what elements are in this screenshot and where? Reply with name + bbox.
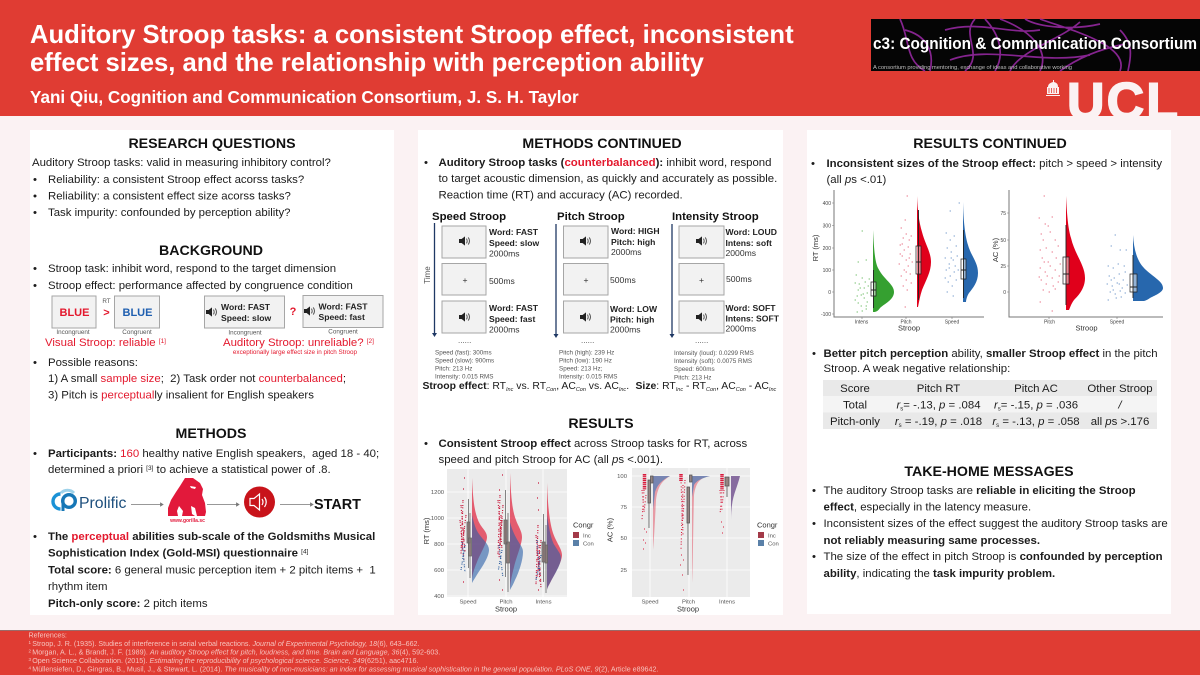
research questions text: • xyxy=(33,207,37,219)
correlation table: Pitch RT xyxy=(917,383,960,395)
background bullets xyxy=(33,263,353,292)
correlation table: p = .058 xyxy=(1038,416,1080,428)
size definition: Con xyxy=(706,387,716,393)
pitch stroop procedure: Pitch: high xyxy=(611,237,655,247)
footer: references: Open Science Collaboration. (2015). xyxy=(32,657,150,665)
axis labels: 0 xyxy=(1003,290,1006,296)
methods continued text xyxy=(424,157,777,202)
intensity stroop procedure: 2000ms xyxy=(726,248,756,258)
chart: RT effect size xyxy=(811,190,984,332)
panel: middle column xyxy=(418,130,783,615)
inconsistent sizes text xyxy=(811,158,1162,186)
gold-msi text: • xyxy=(33,531,37,543)
heading: take-home messages: TAKE-HOME MESSAGES xyxy=(904,464,1074,480)
take-home text: • xyxy=(812,485,816,497)
methods continued text: Auditory Stroop tasks (counterbalanced): inhibit word, respond xyxy=(438,157,771,169)
visual stroop diagram: Visual Stroop: reliable xyxy=(45,337,156,349)
stroop effect definition: . xyxy=(626,381,629,392)
auditory stroop diagram: Speed: fast xyxy=(318,312,365,322)
visual stroop diagram xyxy=(45,296,166,349)
auditory stroop diagram: ? xyxy=(290,306,297,318)
pitch stroop procedure: Word: LOW xyxy=(610,304,658,314)
speed stroop procedure: Speed Stroop xyxy=(432,211,506,223)
speed stroop procedure: Speed: slow xyxy=(489,238,539,248)
axes labels: Stroop xyxy=(495,604,517,614)
stroop effect definition: Stroop effect: RT xyxy=(422,381,506,392)
visual stroop diagram: RT xyxy=(102,298,111,305)
axis labels: 25 xyxy=(1000,264,1006,270)
research questions text: Reliability: a consistent Stroop effect acorss tasks? xyxy=(48,174,304,186)
icon: prolific: Prolific xyxy=(79,495,126,512)
axes labels: 400 xyxy=(434,594,445,600)
icon: prolific xyxy=(53,490,126,512)
intensity stroop procedure: Intensity Stroop xyxy=(672,211,759,223)
correlation table: = -.13, xyxy=(903,400,939,412)
participants text: • xyxy=(33,448,37,460)
size definition: Inc xyxy=(676,387,683,393)
gold-msi text: Pitch-only score: 2 pitch items xyxy=(48,598,208,610)
research questions text xyxy=(32,157,331,219)
correlation table: p = .018 xyxy=(941,416,982,428)
legend: Inc xyxy=(768,534,776,540)
heading: results: RESULTS xyxy=(568,416,634,432)
chart: RT raincloud by congruence xyxy=(422,469,594,614)
icon: audio xyxy=(244,486,275,518)
intensity stroop procedure: Intens: soft xyxy=(726,238,772,248)
authors: Yani Qiu, Cognition and Communication Consortium, J. S. H. Taylor xyxy=(30,88,579,107)
axes labels: RT (ms) xyxy=(422,517,431,544)
arrow xyxy=(207,503,239,506)
size definition: Con xyxy=(736,387,746,393)
axes labels: 50 xyxy=(620,536,628,542)
auditory stroop diagram: Word: FAST xyxy=(318,302,368,312)
gold-msi text: [4] xyxy=(301,548,309,556)
box plots xyxy=(648,475,729,575)
take-home text: • xyxy=(812,518,816,530)
stroop effect definition: , AC xyxy=(556,381,576,392)
perception relationship text: Better pitch perception ability, smaller Stroop effect in the pitch xyxy=(824,348,1158,360)
pitch stroop procedure: Pitch (low): 190 Hz xyxy=(559,358,612,364)
axis labels: Stroop xyxy=(898,324,920,332)
intensity stroop procedure: Intens: SOFT xyxy=(726,314,780,324)
possible reasons: 1) A small sample size; 2) Task order not counterbalanced; xyxy=(48,373,346,385)
axis labels: 300 xyxy=(823,224,831,230)
results text: Consistent Stroop effect across Stroop tasks for RT, across xyxy=(438,438,747,450)
axis labels: 75 xyxy=(1000,211,1006,217)
take-home text: ability, indicating the task impurity problem. xyxy=(824,568,1055,580)
size definition: Inc xyxy=(769,387,777,393)
axis labels: -100 xyxy=(821,312,831,318)
axes labels: 75 xyxy=(620,505,628,511)
pitch stroop procedure: ...... xyxy=(581,336,594,345)
visual stroop diagram: BLUE xyxy=(123,307,152,319)
speed stroop procedure: Speed: fast xyxy=(489,314,535,324)
speed stroop procedure: Speed (fast): 300ms xyxy=(435,350,492,356)
take-home text xyxy=(812,485,1168,580)
pitch stroop procedure: Pitch: high xyxy=(610,314,654,324)
axis labels: RT (ms) xyxy=(811,234,820,261)
auditory stroop diagram: Speed: slow xyxy=(221,313,271,323)
heading: background: BACKGROUND xyxy=(159,243,263,259)
correlation table: s xyxy=(899,423,902,429)
header band xyxy=(0,0,1200,116)
correlation table: s xyxy=(900,406,903,412)
legend: Con xyxy=(768,542,779,548)
correlation table: Pitch AC xyxy=(1014,383,1058,395)
legend: Con xyxy=(583,542,594,548)
footer: references: The musicality of non-musicians: an index for assessing musical sophistication in the general population. PLoS ONE, 9(2), Article e89642. xyxy=(224,666,658,674)
intensity stroop procedure: Word: SOFT xyxy=(726,303,776,313)
research questions text: • xyxy=(33,190,37,202)
correlation table: r xyxy=(895,416,900,428)
axes labels: Speed xyxy=(641,600,659,606)
axis labels: Pitch xyxy=(1044,320,1055,326)
auditory stroop diagram: Incongruent xyxy=(228,330,262,336)
correlation table: Total xyxy=(843,400,867,412)
axes labels xyxy=(422,490,552,614)
methods continued text: to target acoustic dimension, as quickly and accurately as possible. xyxy=(438,173,777,185)
speed stroop procedure: Intensity: 0.015 RMS xyxy=(435,374,493,380)
correlation table xyxy=(823,380,1157,429)
speed stroop procedure xyxy=(432,211,539,380)
research questions text: Reliability: a consistent effect size acorss tasks? xyxy=(48,190,291,202)
pitch stroop procedure: Intensity: 0.015 RMS xyxy=(559,374,617,380)
visual stroop diagram: Congruent xyxy=(122,329,152,336)
rain points xyxy=(1039,196,1128,311)
speed stroop procedure: Word: FAST xyxy=(489,227,539,237)
intensity stroop procedure: Intensity (loud): 0.0299 RMS xyxy=(674,350,754,357)
stroop effect definition: Con xyxy=(546,387,556,393)
stroop effect definition: Inc xyxy=(619,387,626,393)
axes labels: Intens xyxy=(535,600,552,606)
violins xyxy=(1066,196,1085,310)
axis labels: 200 xyxy=(823,246,831,252)
visual stroop diagram: Incongruent xyxy=(56,329,90,336)
visual stroop diagram: > xyxy=(103,307,110,319)
auditory stroop diagram: Congruent xyxy=(328,328,358,336)
auditory stroop diagram: Word: FAST xyxy=(221,302,271,312)
heading: research questions: RESEARCH QUESTIONS xyxy=(128,136,296,152)
intensity stroop procedure: 2000ms xyxy=(726,324,756,334)
footer: references: 2 xyxy=(28,648,32,654)
footer: references: An auditory Stroop effect for pitch, loudness, and time. Brain and Language, 36(4), 592-603. xyxy=(150,648,440,656)
auditory stroop diagram: [2] xyxy=(367,338,374,345)
pitch stroop procedure: Word: HIGH xyxy=(611,226,660,236)
intensity stroop procedure: Speed: 600ms xyxy=(674,366,715,373)
background bullets: • xyxy=(33,263,37,275)
take-home text: The size of the effect in pitch Stroop is confounded by perception xyxy=(824,551,1163,563)
axes labels: Intens xyxy=(719,600,735,606)
inconsistent sizes text: • xyxy=(811,158,815,170)
correlation table: s xyxy=(996,423,999,429)
icon: gorilla xyxy=(168,478,206,524)
auditory stroop diagram: Auditory Stroop: unreliable? xyxy=(223,337,364,349)
correlation table: all ps >.176 xyxy=(1091,416,1149,428)
axis labels: Speed xyxy=(1110,320,1124,326)
speed stroop procedure: Word: FAST xyxy=(489,303,539,313)
axes labels: AC (%) xyxy=(606,517,614,542)
pitch stroop procedure: 2000ms xyxy=(611,247,642,257)
correlation table: / xyxy=(1117,400,1123,412)
possible reasons xyxy=(33,357,346,402)
box plots xyxy=(467,490,548,593)
correlation table: s xyxy=(998,406,1001,412)
intensity stroop procedure: Word: LOUD xyxy=(726,227,777,237)
gold-msi text: Sophistication Index (Gold-MSI) questionnaire xyxy=(48,548,298,560)
chart: AC raincloud by congruence xyxy=(606,468,779,614)
speed stroop procedure: 2000ms xyxy=(489,324,520,334)
axes labels: 800 xyxy=(434,542,445,548)
size definition: - RT xyxy=(683,381,707,392)
legend xyxy=(573,520,594,548)
axis labels xyxy=(811,201,959,332)
pitch stroop procedure xyxy=(554,211,660,380)
footer: references: References: xyxy=(28,632,67,640)
box plots xyxy=(871,210,966,308)
axis labels: Speed xyxy=(945,320,959,326)
violins xyxy=(653,476,670,550)
speed stroop procedure: 2000ms xyxy=(489,248,520,258)
visual stroop diagram: BLUE xyxy=(60,307,89,319)
axes labels: Speed xyxy=(459,600,477,606)
axes labels: 25 xyxy=(620,568,628,574)
intensity stroop procedure: 500ms xyxy=(726,274,752,284)
axes labels xyxy=(606,474,735,614)
correlation table: p = .036 xyxy=(1037,400,1078,412)
correlation table: Score xyxy=(840,383,870,395)
axis labels: Stroop xyxy=(1075,324,1098,332)
size definition: - AC xyxy=(746,381,769,392)
axes labels: 100 xyxy=(617,474,628,480)
title: effect sizes, and the relationship with perception ability xyxy=(30,49,705,77)
arrow xyxy=(131,503,163,506)
visual stroop diagram: [1] xyxy=(159,338,166,345)
start label: START xyxy=(314,497,361,513)
axis labels xyxy=(991,211,1124,332)
stroop effect definition: Con xyxy=(576,387,586,393)
gold-msi text: Total score: 6 general music perception item + 2 pitch items + 1 xyxy=(48,564,376,576)
possible reasons: • xyxy=(33,357,37,369)
stroop effect definition: vs. RT xyxy=(513,381,547,392)
methods continued text: Reaction time (RT) and accuracy (AC) recorded. xyxy=(438,190,683,202)
take-home text: • xyxy=(812,551,816,563)
pitch stroop procedure: 500ms xyxy=(610,275,636,285)
axes labels: 600 xyxy=(434,568,445,574)
intensity stroop procedure: Intensity (soft): 0.0075 RMS xyxy=(674,358,752,365)
footer: references: Morgan, A. L., & Brandt, J. F. (1989). xyxy=(32,648,150,656)
methods continued text: • xyxy=(424,157,428,169)
stroop effect definition: vs. AC xyxy=(586,381,619,392)
legend: Inc xyxy=(583,534,591,540)
possible reasons: Possible reasons: xyxy=(48,357,138,369)
title: Auditory Stroop tasks: a consistent Stroop effect, inconsistent xyxy=(30,21,794,49)
footer: references: Stroop, J. R. (1935). Studies of interference in serial verbal reactions. xyxy=(32,640,252,648)
time label: Time xyxy=(423,266,432,284)
take-home text: The auditory Stroop tasks are reliable in eliciting the Stroop xyxy=(824,485,1136,497)
correlation table: p = .084 xyxy=(939,400,981,412)
intensity stroop procedure: Pitch: 213 Hz xyxy=(674,374,711,382)
panel: right column xyxy=(807,130,1171,614)
legend xyxy=(757,520,779,548)
speed stroop procedure: 500ms xyxy=(489,276,515,286)
speed stroop procedure: Speed (slow): 900ms xyxy=(435,358,494,364)
correlation table: Pitch-only xyxy=(830,416,880,428)
auditory stroop diagram: exceptionally large effect size in pitch Stroop xyxy=(233,349,358,356)
pitch stroop procedure: Speed: 213 Hz; xyxy=(559,366,603,372)
footer: references: 3 xyxy=(28,657,32,662)
footer: references: 4 xyxy=(28,666,32,670)
footer: references xyxy=(0,630,1200,675)
UCL logo: UCL xyxy=(1067,73,1178,131)
axis labels: 100 xyxy=(823,268,831,274)
c3 banner xyxy=(871,19,1200,71)
panel: left column xyxy=(30,130,394,615)
correlation table: r xyxy=(994,400,999,412)
UCL logo xyxy=(1046,80,1178,116)
axis labels: AC (%) xyxy=(991,237,1000,262)
inconsistent sizes text: (all ps <.01) xyxy=(826,174,887,186)
possible reasons: 3) Pitch is perceptually insalient for English speakers xyxy=(48,390,314,402)
pitch stroop procedure: 2000ms xyxy=(610,324,641,334)
footer: references: 1 xyxy=(28,640,32,645)
axis labels: 400 xyxy=(823,201,831,207)
perception relationship text: • xyxy=(812,348,816,360)
axes labels: 1000 xyxy=(431,516,445,522)
results text xyxy=(424,438,747,466)
correlation table: = -.19, xyxy=(902,416,941,428)
perception relationship text xyxy=(812,348,1158,375)
intensity stroop procedure: ...... xyxy=(695,336,708,345)
research questions text: • xyxy=(33,174,37,186)
intensity stroop procedure xyxy=(670,211,780,382)
stroop effect definition: Inc xyxy=(506,387,514,393)
research questions text: Task impurity: confounded by perception ability? xyxy=(48,207,291,219)
gold-msi text: The perceptual abilities sub-scale of the Goldsmiths Musical xyxy=(48,531,375,543)
inconsistent sizes text: Inconsistent sizes of the Stroop effect: pitch > speed > intensity xyxy=(826,158,1162,170)
correlation table: Other Stroop xyxy=(1087,383,1153,395)
violins xyxy=(873,230,894,312)
size definition: , AC xyxy=(716,381,736,392)
axes labels: Stroop xyxy=(677,604,699,614)
footer: references: Estimating the reproducibility of psychological science. Science, 349(6251), aac4716. xyxy=(150,657,418,665)
correlation table: = -.13, xyxy=(999,416,1038,428)
research questions text: Auditory Stroop tasks: valid in measuring inhibitory control? xyxy=(32,157,331,169)
speed stroop procedure: Pitch: 213 Hz xyxy=(435,366,472,372)
pitch stroop procedure: Pitch (high): 239 Hz xyxy=(559,350,614,356)
background bullets: • xyxy=(33,280,37,292)
intensity stroop procedure: + xyxy=(699,275,704,285)
axis labels: 50 xyxy=(1000,238,1006,244)
correlation table: r xyxy=(896,400,901,412)
footer: references: Müllensiefen, D., Gingras, B., Musil, J., & Stewart, L. (2014). xyxy=(32,666,224,674)
legend: Congr xyxy=(757,520,778,530)
speed stroop procedure: + xyxy=(462,275,468,285)
recruitment flow xyxy=(53,478,361,524)
pitch stroop procedure: Pitch Stroop xyxy=(557,211,625,223)
footer: references: Journal of Experimental Psychology, 18(6), 643–662. xyxy=(252,640,419,648)
results text: speed and pitch Stroop for AC (all ps <.001). xyxy=(438,454,663,466)
heading: methods continued: METHODS CONTINUED xyxy=(522,136,682,152)
participants text xyxy=(33,448,379,476)
background bullets: Stroop task: inhibit word, respond to the target dimension xyxy=(48,263,336,275)
take-home text: Inconsistent sizes of the effect suggest the auditory Stroop tasks are xyxy=(824,518,1168,530)
speed stroop procedure: ...... xyxy=(458,336,471,345)
heading: results continued: RESULTS CONTINUED xyxy=(913,136,1067,152)
rain points xyxy=(642,474,724,590)
take-home text: effect, especially in the latency measure. xyxy=(824,502,1031,514)
axes labels: Pitch xyxy=(682,600,695,606)
auditory stroop diagram xyxy=(204,296,383,356)
heading: methods: METHODS xyxy=(176,426,246,442)
icon: gorilla: www.gorilla.sc xyxy=(169,518,205,524)
size definition: Size: RT xyxy=(636,381,676,392)
axes labels: 1200 xyxy=(431,490,445,496)
box plots xyxy=(1063,225,1137,305)
axis labels: Intens xyxy=(855,320,869,326)
axis labels: Pitch xyxy=(900,320,912,326)
correlation table: = -.15, xyxy=(1001,400,1037,412)
participants text: to achieve a statistical power of .8. xyxy=(153,464,331,476)
gold-msi text xyxy=(33,531,376,610)
background bullets: Stroop effect: performance affected by congruence condition xyxy=(48,280,353,292)
results text: • xyxy=(424,438,428,450)
arrow xyxy=(280,503,313,506)
axes labels: Pitch xyxy=(499,600,513,606)
axis labels: 0 xyxy=(828,290,831,296)
c3 banner: A consortium providing mentoring, exchange of ideas and collaborative working xyxy=(873,65,1072,71)
violins xyxy=(472,473,562,590)
chart: AC effect size xyxy=(991,190,1163,332)
participants text: Participants: 160 healthy native English speakers, aged 18 - 40; xyxy=(48,448,379,460)
participants text: [3] xyxy=(146,465,154,472)
participants text: determined a priori xyxy=(48,464,143,476)
legend: Congr xyxy=(573,520,594,530)
rain points xyxy=(460,475,541,590)
take-home text: not reliably measuring same processes. xyxy=(824,535,1040,547)
correlation table: r xyxy=(992,416,997,428)
rain points xyxy=(855,196,960,312)
perception relationship text: Stroop. A weak negative relationship: xyxy=(824,363,1010,375)
pitch stroop procedure: + xyxy=(583,275,589,285)
gold-msi text: rhythm item xyxy=(48,581,108,593)
